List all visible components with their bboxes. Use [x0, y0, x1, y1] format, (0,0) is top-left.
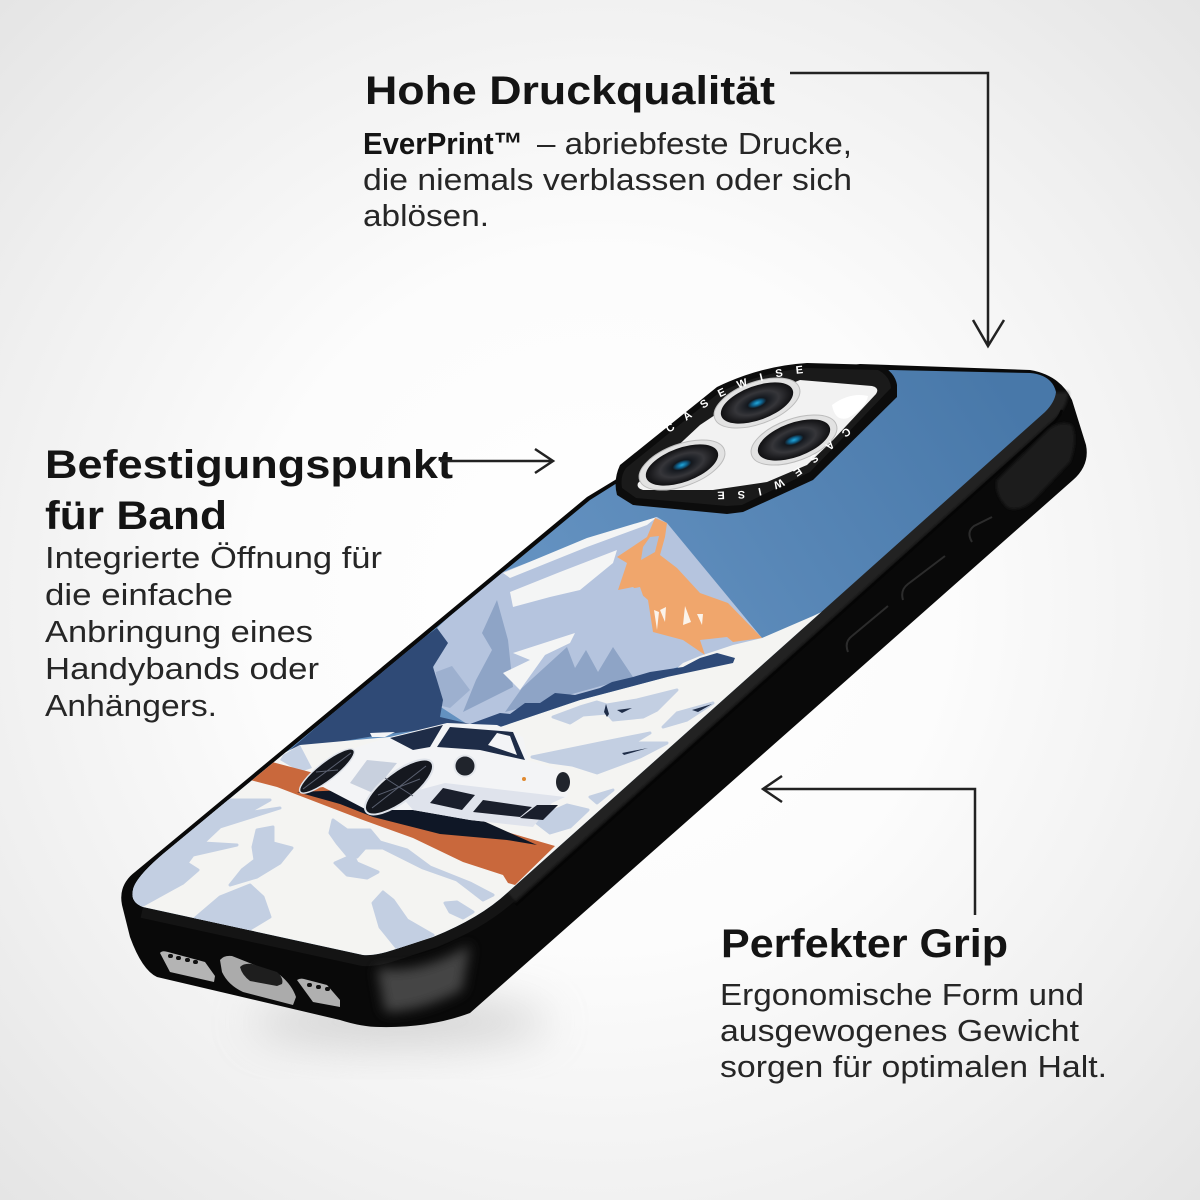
lens 1	[633, 430, 731, 500]
brand lettering top: CASEWISE	[666, 366, 803, 432]
phone case	[121, 363, 1087, 1028]
body text: Ergonomische Form und	[720, 977, 1084, 1012]
callout: print quality	[363, 69, 852, 233]
mountain	[430, 517, 762, 726]
glass camera plate	[638, 380, 877, 490]
body text: Handybands oder	[45, 651, 319, 686]
right headlight	[556, 772, 570, 792]
body text: ablösen.	[363, 198, 489, 233]
bezel top surface	[622, 368, 891, 506]
charging port	[220, 956, 296, 1005]
camera island	[616, 363, 897, 514]
sports car	[295, 723, 570, 827]
tree line	[470, 653, 735, 727]
body text: sorgen für optimalen Halt.	[720, 1049, 1107, 1084]
callout: grip	[720, 922, 1107, 1084]
body text: Integrierte Öffnung für	[45, 540, 382, 575]
grilles	[430, 788, 558, 820]
dark navy mountain	[290, 628, 470, 750]
snow patches behind car	[553, 690, 677, 723]
orange sunlit face	[617, 518, 762, 655]
glass reflection	[832, 395, 868, 419]
case bottom rim	[143, 893, 507, 955]
heading	[45, 443, 453, 538]
foreground snow	[132, 612, 822, 956]
side button 1	[847, 556, 945, 652]
body text	[720, 977, 1107, 1084]
left speaker	[160, 951, 215, 982]
rear wheel	[298, 748, 355, 794]
side button small	[969, 517, 992, 542]
front wheel	[364, 758, 434, 816]
body text: die niemals verblassen oder sich	[363, 162, 852, 197]
brand lettering bottom: CASEWISE	[718, 428, 850, 500]
car shaded door	[350, 760, 397, 793]
hood crest	[522, 777, 526, 781]
arrow: grip	[763, 776, 975, 915]
corner reflection	[377, 945, 470, 1012]
heading: Befestigungspunkt	[45, 443, 453, 487]
car shadow	[297, 788, 537, 845]
right speaker	[297, 979, 340, 1007]
case right rim	[507, 392, 1056, 893]
lens 3	[745, 405, 843, 475]
callout: strap attachment	[45, 443, 453, 723]
arrow: strap attachment	[440, 449, 553, 473]
snow patches foreground	[133, 800, 280, 907]
rim groove	[516, 410, 1062, 905]
sky	[132, 370, 1056, 956]
heading: Hohe Druckqualität	[365, 69, 775, 113]
pale snow beside road	[280, 745, 312, 772]
phone shadow	[250, 1000, 550, 1044]
heading: für Band	[45, 494, 227, 538]
lower bumper	[400, 783, 565, 827]
case body	[121, 364, 1087, 1027]
camera bezel	[616, 363, 897, 514]
rear cabin window	[488, 733, 517, 755]
arrow: print quality	[790, 73, 1004, 346]
body text: EverPrint™	[363, 126, 523, 161]
heading: Perfekter Grip	[721, 922, 1008, 966]
body text: die einfache	[45, 577, 233, 612]
rear spoiler	[370, 732, 395, 737]
lens 2	[708, 368, 806, 438]
body text: Anhängers.	[45, 688, 217, 723]
car body	[320, 723, 539, 823]
left headlight	[454, 756, 476, 776]
dark rocks	[604, 704, 712, 755]
windshield	[437, 727, 525, 760]
body text	[45, 540, 382, 723]
body text	[363, 126, 852, 233]
road	[250, 762, 555, 885]
printed artwork	[132, 370, 1056, 956]
mountain shaded faces	[463, 600, 513, 712]
strap attachment bump	[996, 423, 1075, 509]
body text: Anbringung eines	[45, 614, 313, 649]
body text: – abriebfeste Drucke,	[537, 126, 852, 161]
side window	[390, 725, 443, 750]
snow highlights	[503, 517, 657, 578]
body text: ausgewogenes Gewicht	[720, 1013, 1079, 1048]
